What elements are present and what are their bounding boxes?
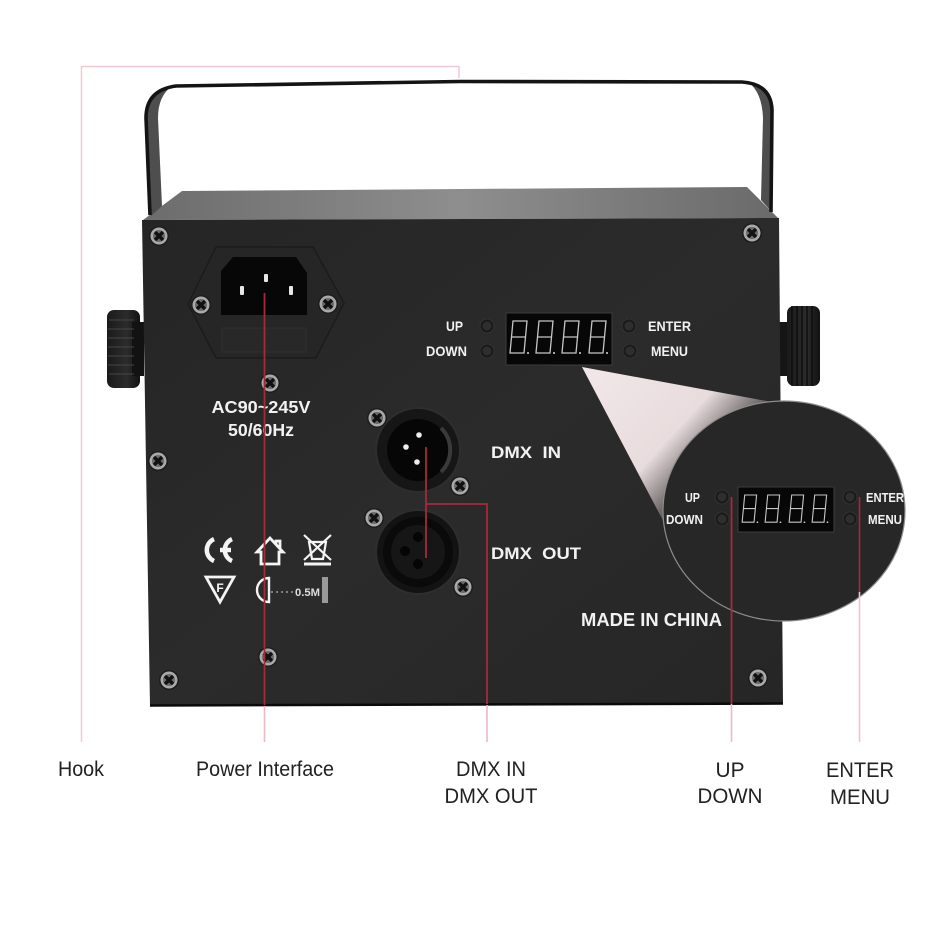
magnified labels: UP <box>685 490 700 505</box>
magnified display <box>738 487 834 532</box>
magnified digits <box>742 495 828 523</box>
XLR connector: DMX out <box>364 508 473 597</box>
caption: Hook: Hook <box>58 757 104 781</box>
XLR connector: DMX in <box>367 408 470 496</box>
caption: DMX IN / DMX OUT: DMX OUT <box>444 784 538 808</box>
magnified control panel <box>663 401 905 621</box>
magnifier circle <box>663 401 905 621</box>
inlet pins <box>240 274 293 295</box>
callout line: up down <box>730 497 732 704</box>
device rear panel <box>142 218 783 706</box>
magnified labels <box>666 490 905 527</box>
certification icons <box>206 535 331 603</box>
caption: DMX IN / DMX OUT: DMX IN <box>456 757 526 781</box>
inlet plate <box>188 247 344 358</box>
handle left arm <box>147 86 172 216</box>
caption: ENTER / MENU: MENU <box>830 785 890 809</box>
control labels: UP <box>446 318 463 334</box>
control labels: DOWN <box>426 343 467 359</box>
voltage label: 50/60Hz <box>228 420 294 440</box>
control labels: MENU <box>651 343 688 359</box>
LED display <box>506 313 612 365</box>
voltage label: AC90~245V <box>212 397 311 417</box>
handle <box>146 82 772 216</box>
callout line: power interface <box>264 293 266 705</box>
knob: left <box>107 310 144 388</box>
handle right arm <box>748 82 772 212</box>
label: MADE IN CHINA: MADE IN CHINA <box>581 609 722 630</box>
magnified buttons <box>715 490 857 526</box>
callout line: enter menu, outside magnifier <box>858 592 860 742</box>
LED digits <box>510 321 608 354</box>
control labels <box>426 318 691 359</box>
icon: CE mark <box>207 539 232 561</box>
voltage label <box>212 397 311 440</box>
magnified labels: ENTER <box>866 490 905 505</box>
callout line: enter menu, inside magnifier <box>858 497 860 592</box>
magnifier highlight beam <box>582 367 772 530</box>
caption: DMX IN / DMX OUT <box>444 757 538 808</box>
icon: F triangle: F <box>216 581 224 595</box>
magnified labels: DOWN <box>666 512 703 527</box>
knob: right <box>778 306 820 386</box>
panel bottom edge <box>150 704 783 706</box>
control buttons <box>480 319 637 358</box>
caption: ENTER / MENU: ENTER <box>826 758 894 782</box>
handle outer edge <box>146 82 772 215</box>
fuse drawer <box>222 328 306 352</box>
label: DMX OUT: DMX OUT <box>491 544 582 563</box>
inlet socket <box>221 257 307 315</box>
caption: Power Interface: Power Interface <box>196 757 334 781</box>
device top face <box>143 187 778 220</box>
control panel <box>426 313 691 365</box>
caption: ENTER / MENU <box>826 758 894 809</box>
power inlet <box>188 247 344 358</box>
hook callout line <box>82 66 459 742</box>
panel screws <box>148 223 768 690</box>
label: DMX IN: DMX IN <box>491 443 561 462</box>
icon: half lens distance: 0.5M <box>295 587 320 599</box>
icon: crossed-out bin <box>304 535 331 564</box>
icon: indoor use house <box>257 538 283 564</box>
caption: UP / DOWN: UP <box>716 758 744 782</box>
caption: UP / DOWN: DOWN <box>698 784 762 808</box>
control labels: ENTER <box>648 318 691 334</box>
callout line tails below panel <box>264 704 732 742</box>
magnified labels: MENU <box>868 512 902 527</box>
voltage screw <box>260 373 280 393</box>
caption: UP / DOWN <box>698 758 762 808</box>
callout line: DMX <box>426 447 487 704</box>
